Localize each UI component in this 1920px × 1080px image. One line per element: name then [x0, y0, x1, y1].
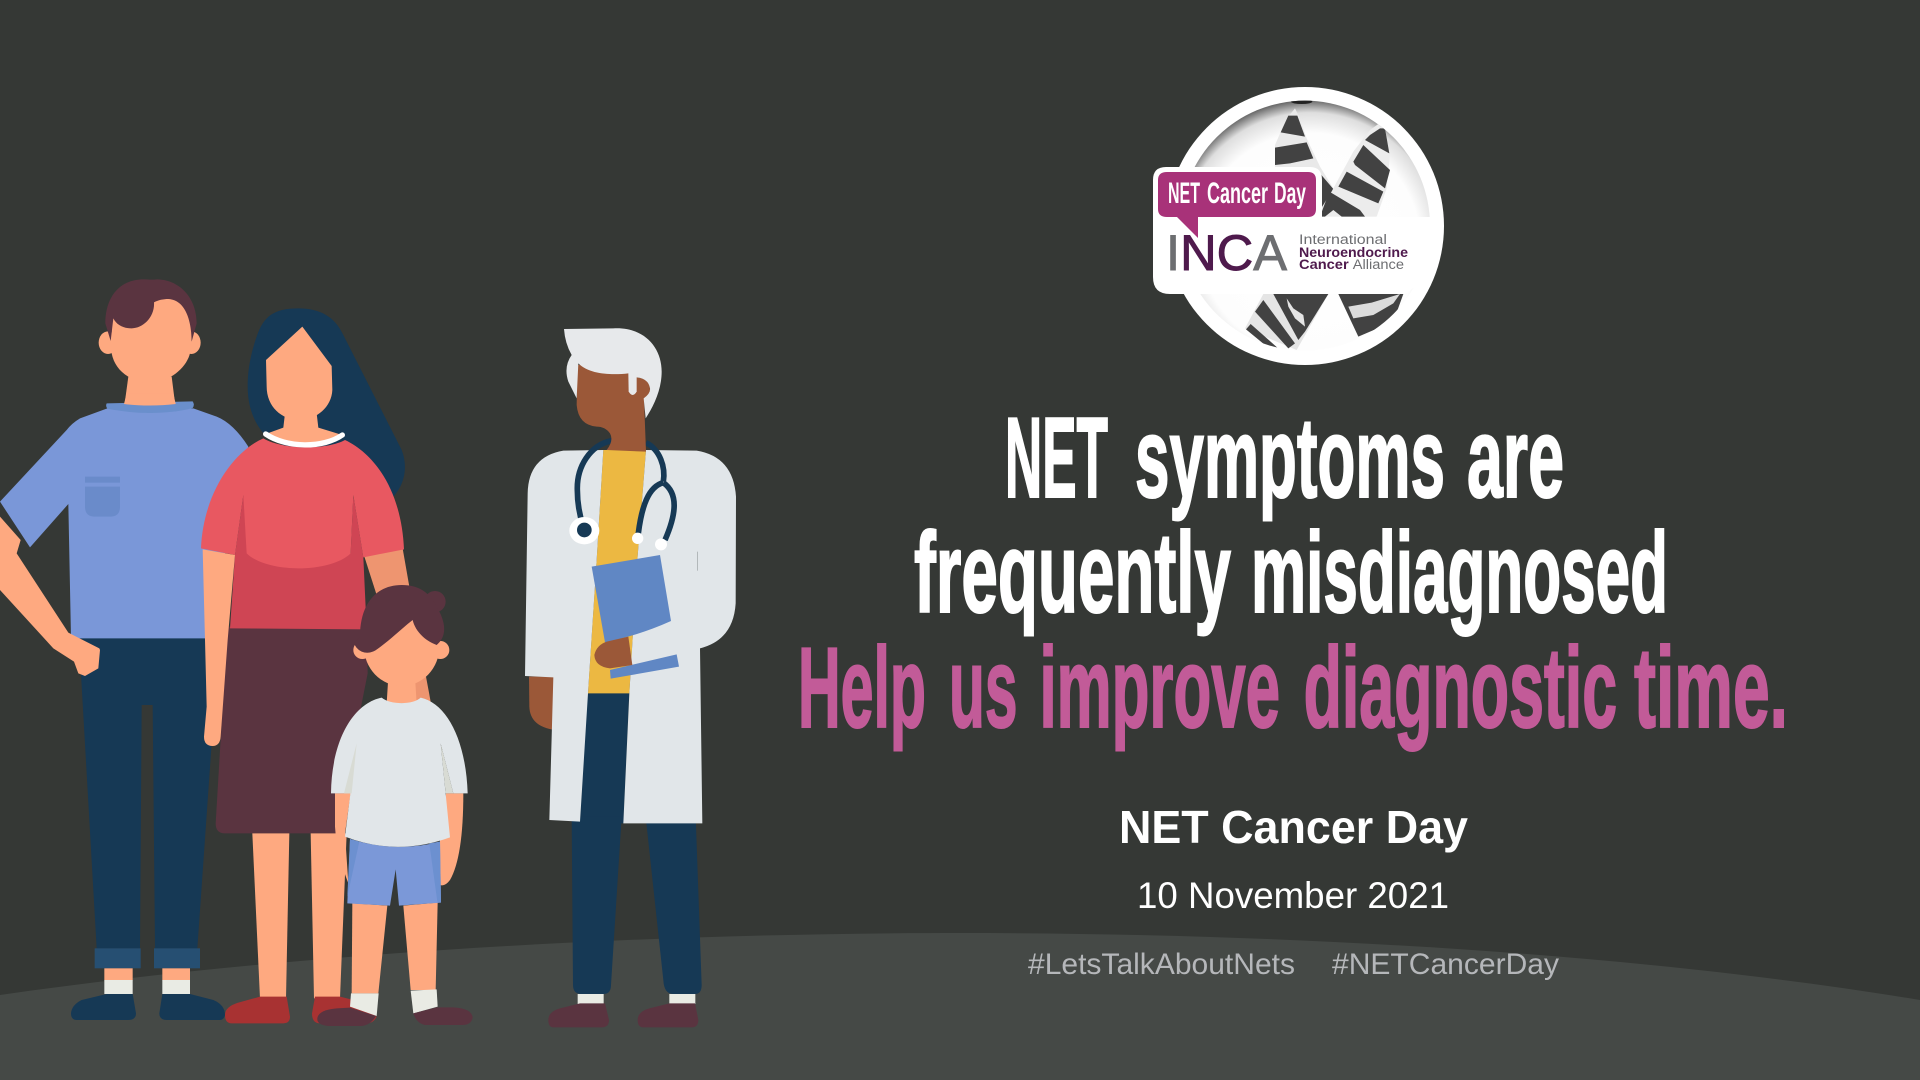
speech bubble: Cancer: [1207, 177, 1268, 210]
title line 2: frequently: [914, 510, 1231, 637]
figure: doctor: [525, 328, 736, 1027]
speech bubble: NET: [1168, 177, 1200, 210]
title line 3: improve: [1040, 625, 1280, 752]
title line 3: [798, 625, 1788, 752]
title line 1: are: [1467, 395, 1564, 522]
alliance name: International: [1299, 232, 1387, 247]
logo badge: [1153, 87, 1444, 365]
figure: father: [0, 279, 248, 1020]
hashtag 2: #NETCancerDay: [1332, 948, 1559, 981]
title line 1: symptoms: [1135, 395, 1445, 522]
event date: 10 November 2021: [1137, 875, 1449, 916]
speech bubble: [1158, 172, 1316, 238]
title line 3: time.: [1634, 625, 1788, 752]
event name: NET Cancer Day: [1119, 801, 1468, 853]
speech bubble: Day: [1274, 177, 1306, 210]
badge ribbon artwork: [1180, 99, 1430, 351]
title line 1: [1005, 395, 1564, 522]
ground hill: [0, 933, 1920, 1080]
title line 1: NET: [1005, 395, 1108, 522]
alliance name: Neuroendocrine: [1299, 245, 1409, 260]
title line 3: us: [949, 625, 1018, 752]
hashtag 1: #LetsTalkAboutNets: [1028, 948, 1295, 981]
alliance name: [1299, 232, 1409, 272]
figure: child: [317, 585, 473, 1026]
alliance name: Cancer Alliance: [1299, 257, 1404, 272]
badge ring: [1166, 87, 1444, 365]
white label strip: [1153, 167, 1434, 294]
title line 3: Help: [798, 625, 926, 752]
figure: mother: [201, 308, 409, 1023]
INCA wordmark: INCA: [1166, 225, 1288, 281]
title line 3: diagnostic: [1304, 625, 1617, 752]
title: [798, 395, 1788, 752]
